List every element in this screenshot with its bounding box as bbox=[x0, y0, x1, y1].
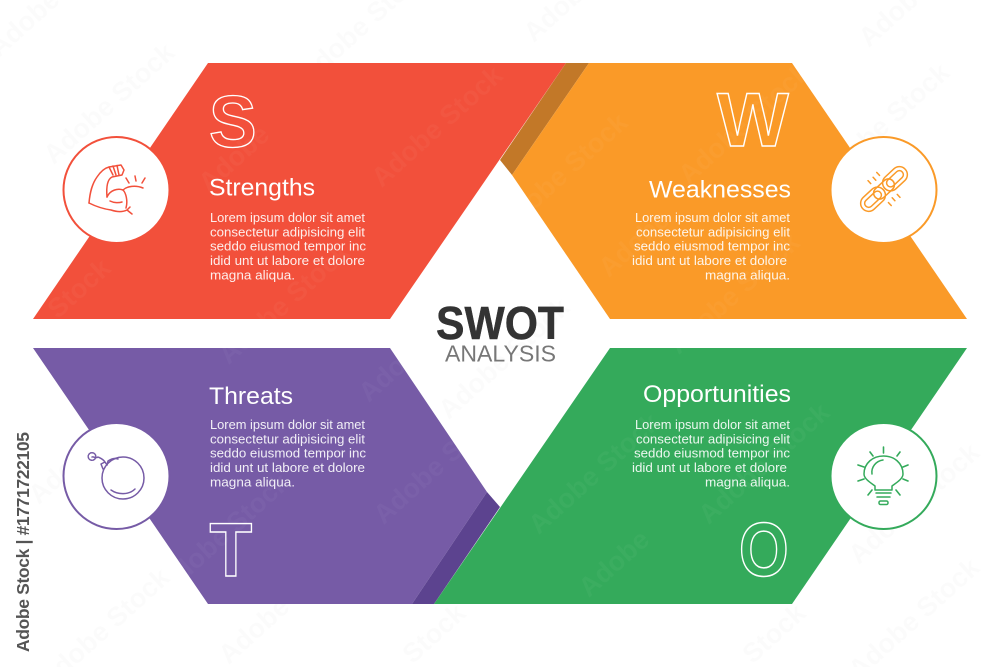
watermark on background: Adobe Stock bbox=[813, 56, 956, 190]
watermark over panels: Adobe Stock bbox=[153, 466, 296, 600]
letter O: O bbox=[739, 507, 789, 592]
watermark over panels: Adobe Stock bbox=[663, 226, 806, 360]
watermark over panels: Adobe bbox=[193, 119, 275, 198]
center subtitle: ANALYSIS: ANALYSIS bbox=[445, 340, 556, 366]
watermark on background: Adobe Stock bbox=[213, 536, 356, 667]
watermark over panels: Adobe bbox=[353, 329, 435, 408]
panel: strengths bbox=[33, 63, 566, 319]
text block: threats bbox=[210, 417, 366, 489]
watermark on background: Adobe Stock bbox=[433, 291, 576, 425]
text block: weaknesses: consectetur adipisicing elit bbox=[636, 224, 790, 239]
watermark over panels: Stock bbox=[42, 252, 117, 324]
letter T: T bbox=[210, 508, 252, 593]
watermark over panels: Adobe Stock bbox=[366, 59, 509, 193]
shadow strip: threats bbox=[412, 492, 500, 604]
panel: opportunities bbox=[434, 348, 967, 604]
panel: threats bbox=[33, 348, 500, 604]
watermark over panels: Adobe Stock bbox=[368, 396, 511, 530]
text block: strengths: consectetur adipisicing elit bbox=[210, 224, 365, 239]
watermark over panels: Adobe Stock bbox=[523, 406, 666, 540]
text block: threats: Lorem ipsum dolor sit amet bbox=[210, 417, 365, 432]
watermark over panels: Adobe Stock bbox=[693, 396, 836, 530]
watermark on background: Adobe Stock bbox=[843, 436, 986, 570]
center title: SWOT: SWOT bbox=[436, 297, 564, 349]
circle icon: bomb bbox=[64, 423, 170, 529]
text block: opportunities: Lorem ipsum dolor sit amet bbox=[635, 417, 790, 432]
watermark on background: Adobe Stock bbox=[38, 36, 181, 170]
watermark on background: Stock bbox=[737, 597, 812, 667]
text block: strengths: Lorem ipsum dolor sit amet bbox=[210, 210, 365, 225]
watermark over panels: Adobe Stock bbox=[213, 236, 356, 370]
text block: opportunities bbox=[632, 417, 790, 489]
shadow strip: weaknesses bbox=[500, 63, 589, 175]
text block: opportunities: idid unt ut labore et dolore bbox=[632, 460, 787, 475]
circle icon: broken chain bbox=[830, 137, 936, 243]
panel: weaknesses bbox=[500, 63, 967, 319]
stock id text: Adobe Stock | #1771722105 bbox=[13, 432, 33, 652]
text block: weaknesses bbox=[632, 210, 790, 282]
text block: opportunities: seddo eiusmod tempor inc bbox=[634, 446, 790, 461]
heading: Strengths: Strengths bbox=[209, 174, 315, 202]
watermark over panels: Adobe bbox=[573, 524, 655, 603]
heading: Threats: Threats bbox=[209, 383, 293, 410]
text block: strengths: seddo eiusmod tempor inc bbox=[210, 239, 366, 254]
watermark over panels: Adobe bbox=[593, 204, 675, 283]
heading: Opportunities: Opportunities bbox=[643, 381, 791, 408]
text block: opportunities: magna aliqua. bbox=[705, 474, 790, 489]
watermark over panels: Adobe Stock bbox=[673, 56, 816, 190]
text block: opportunities: consectetur adipisicing elit bbox=[636, 431, 790, 446]
watermark on background: Stock bbox=[397, 597, 472, 667]
letter S: S bbox=[209, 81, 257, 163]
text block: weaknesses: magna aliqua. bbox=[705, 267, 790, 282]
text block: weaknesses: Lorem ipsum dolor sit amet bbox=[635, 210, 790, 225]
text block: threats: seddo eiusmod tempor inc bbox=[210, 446, 366, 461]
text block: threats: idid unt ut labore et dolore bbox=[210, 460, 365, 475]
circle icon: light bulb bbox=[830, 423, 936, 529]
text block: strengths bbox=[210, 210, 366, 282]
letter W: W bbox=[717, 78, 789, 163]
text block: strengths: magna aliqua. bbox=[210, 267, 295, 282]
circle icon: flexed muscle bbox=[64, 137, 170, 243]
text block: weaknesses: seddo eiusmod tempor inc bbox=[634, 239, 790, 254]
watermark on background: Adobe Stock bbox=[23, 376, 166, 510]
text block: strengths: idid unt ut labore et dolore bbox=[210, 253, 365, 268]
text block: threats: consectetur adipisicing elit bbox=[210, 431, 365, 446]
text block: weaknesses: idid unt ut labore et dolore bbox=[632, 253, 787, 268]
watermark over panels: Adobe Stock bbox=[491, 106, 634, 240]
heading: Weaknesses: Weaknesses bbox=[649, 176, 791, 204]
text block: threats: magna aliqua. bbox=[210, 474, 295, 489]
watermark over panels bbox=[42, 56, 836, 603]
